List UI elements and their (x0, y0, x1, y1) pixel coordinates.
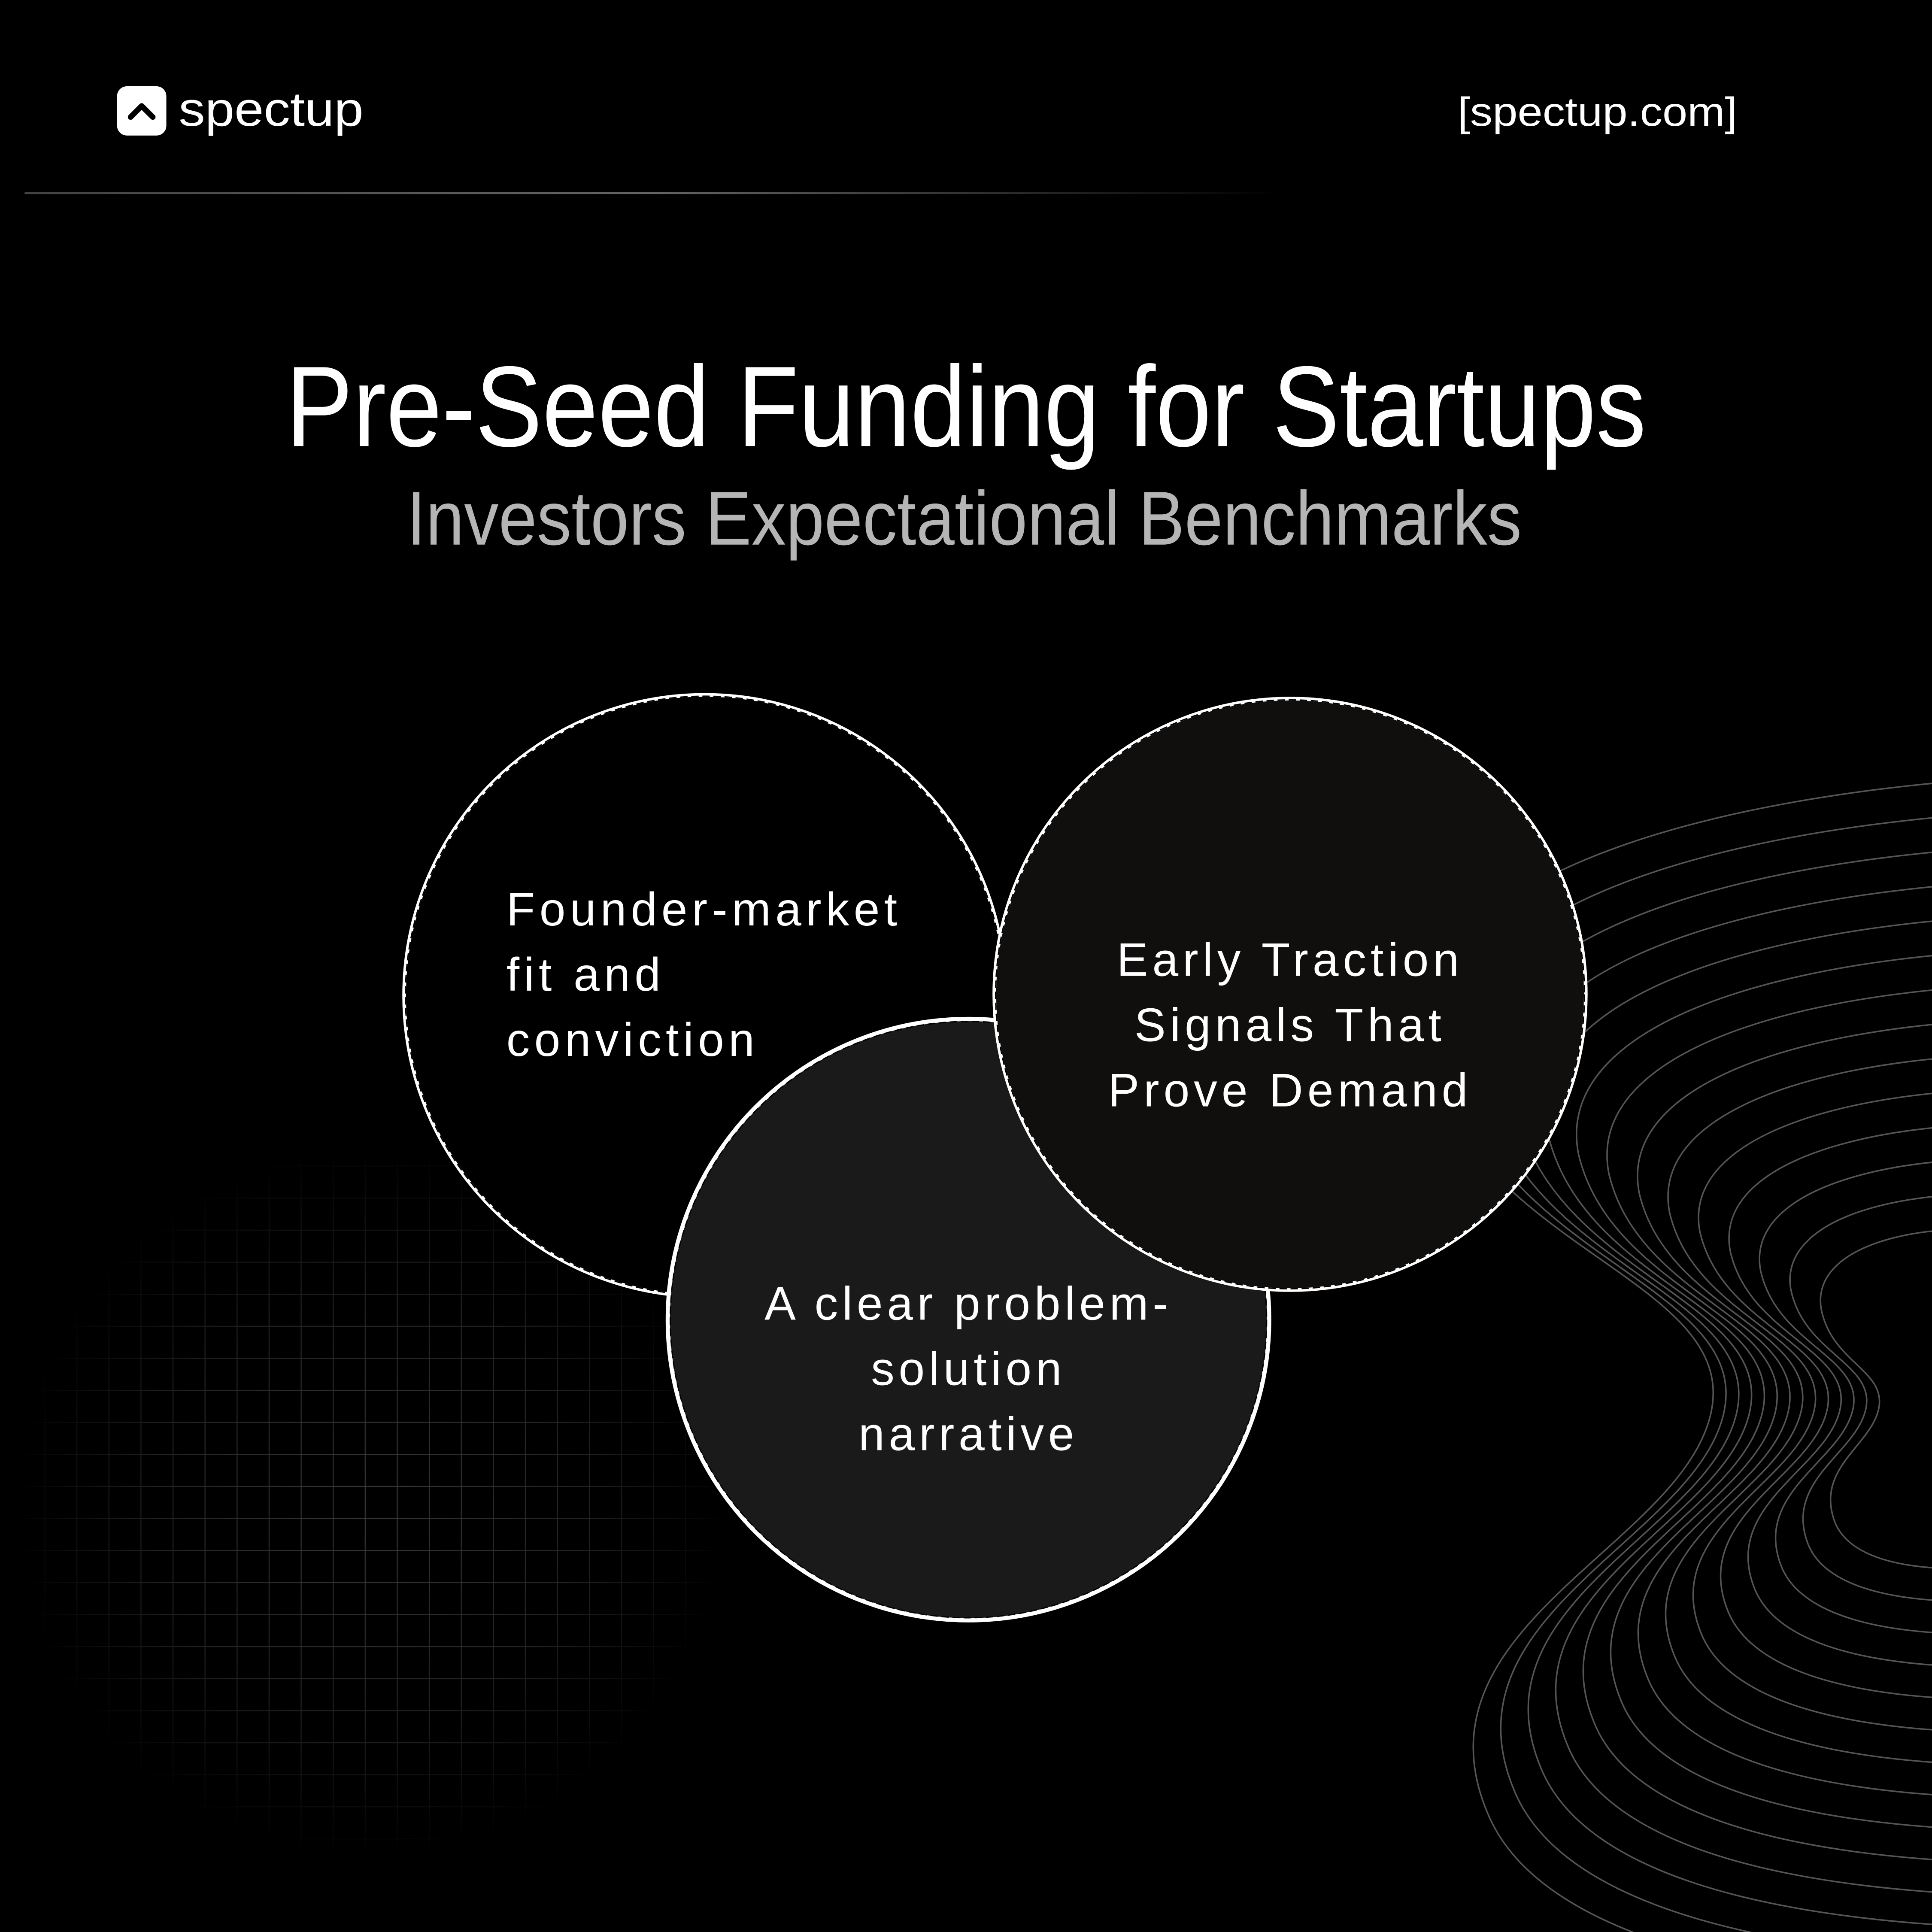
circle: problem-solution narrative: A clear problem- (764, 1277, 1172, 1330)
circle: problem-solution narrative (668, 1019, 1269, 1620)
circle: early traction (995, 699, 1586, 1290)
circle: problem-solution narrative: narrative (858, 1408, 1078, 1461)
circle: early traction: Prove Demand (1108, 1065, 1472, 1117)
grid pattern background (48, 1181, 692, 1826)
website url: [spectup.com] (1458, 89, 1737, 135)
title: Pre-Seed Funding for Startups (286, 342, 1646, 471)
contour lines decoration (1424, 773, 1932, 1932)
logo (117, 82, 364, 136)
circle: early traction: Early Traction (1117, 934, 1463, 986)
circle: founder-market fit: Founder-market (507, 883, 901, 936)
circle: problem-solution narrative: solution (871, 1343, 1066, 1395)
circle: founder-market fit: fit and (507, 949, 665, 1001)
subtitle: Investors Expectational Benchmarks (406, 476, 1522, 561)
logo: spectup (179, 82, 364, 136)
circle: early traction: Signals That (1134, 999, 1446, 1052)
circle: founder-market fit (404, 695, 1005, 1296)
circle: founder-market fit: conviction (507, 1014, 759, 1066)
